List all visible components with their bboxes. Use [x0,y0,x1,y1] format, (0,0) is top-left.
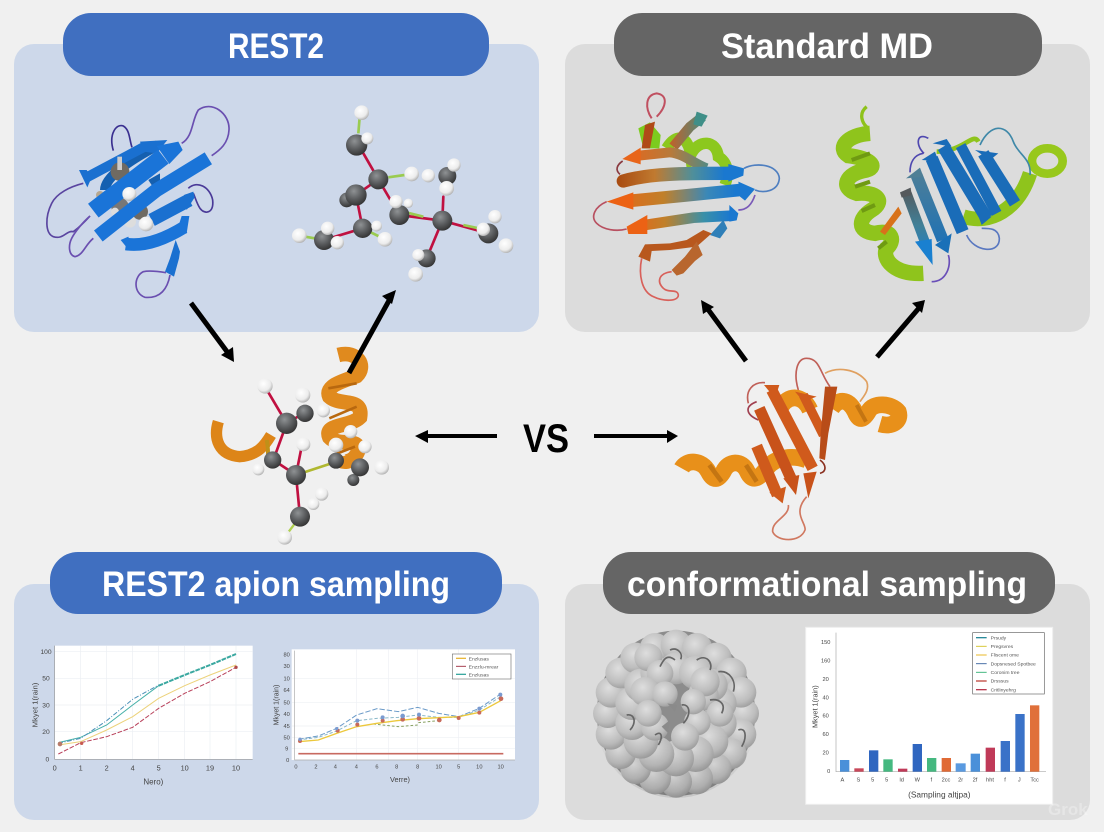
x axis tick labels: 0 [294,765,298,771]
x axis tick labels: 2r [958,777,963,783]
arrow: center to molecule [349,290,396,373]
legend: Dopsnesed Spotbee [991,661,1036,667]
x axis tick labels: 4 [131,764,135,773]
orange-blue beta-sheet protein [594,93,779,300]
bars [840,705,1039,772]
x axis tick labels: 2 [105,764,109,773]
x axis tick labels: 5 [157,764,161,773]
bar chart panel [806,627,1053,804]
x axis tick labels [840,777,1039,783]
x axis tick labels [294,765,504,771]
y axis tick labels [821,640,830,775]
legend: Enzzlu-mrear [469,664,499,670]
baseline series [298,751,503,756]
arrow: blue protein to center [191,303,234,362]
heading: REST2 apion sampling [50,552,502,614]
x axis tick labels: 10 [476,765,482,771]
axis titles: Nero) [143,778,164,787]
y axis tick labels: 60 [823,714,829,720]
green-blue protein [843,107,1063,282]
x axis tick labels [53,764,240,773]
arrow: VS right [594,430,678,443]
legend: Fliscent ome [991,653,1019,659]
x axis tick labels: 4 [334,765,337,771]
heading: conformational sampling [603,552,1055,614]
axis titles: Verre) [390,775,410,784]
axis title x: (Sampling altjpa) [908,789,971,799]
heading: conformational sampling: conformational sampling [627,565,1027,604]
blue beta-sheet protein [47,107,229,297]
y axis tick labels: 50 [42,676,50,683]
axis titles: Mkyet 1(rain) [273,685,280,725]
heading: REST2: REST2 [228,27,324,66]
watermark: Grok [1048,800,1088,819]
axis titles [30,682,164,787]
orange helix with molecule, center left [217,354,389,545]
x axis tick labels: 10 [232,764,240,773]
legend: Coronim tree [991,670,1020,676]
x axis tick labels: A [840,777,844,783]
legend: Pregsvres [991,644,1014,650]
x axis tick labels: 5 [457,765,460,771]
x axis tick labels: 5 [885,777,888,783]
panel: REST2 [14,44,539,332]
y axis tick labels: 64 [284,688,290,694]
axis title y: Mkyet 1(rain) [810,685,819,728]
y axis tick labels: 20 [42,729,50,736]
sphere crevices [627,649,745,747]
data markers [298,693,503,743]
legend: Enzlusas [469,656,489,662]
legend: Critlinyehrg [991,687,1016,693]
legend [452,654,511,679]
y axis tick labels: 160 [821,659,830,665]
x axis tick labels: 2cc [942,777,951,783]
x axis tick labels: Tcc [1030,777,1039,783]
x axis tick labels: 19 [206,764,214,773]
y axis tick labels: 20 [823,677,829,683]
y axis tick labels: 150 [821,640,830,646]
y axis tick labels: 9 [285,747,288,753]
y axis tick labels: 0 [286,758,289,764]
x axis tick labels: 2 [314,765,318,771]
line chart: left [30,646,253,787]
x axis tick labels: S [856,777,860,783]
x axis tick labels: W [915,777,921,783]
line chart: right [273,649,515,784]
y axis tick labels: 50 [284,735,290,741]
arrow: center to green-blue protein [877,300,925,357]
x axis tick labels: 6 [375,765,379,771]
heading: REST2 apion sampling: REST2 apion sampling [102,565,450,604]
y axis tick labels [40,649,52,764]
y axis tick labels: 40 [284,712,290,718]
y axis tick labels: 10 [284,676,290,682]
y axis tick labels: 100 [40,649,52,656]
y axis tick labels: 40 [823,695,829,701]
chart lines [58,654,236,754]
orange protein, center right [682,358,899,540]
axis titles [273,685,410,784]
ball-and-stick molecule, REST2 panel [292,105,513,282]
y axis tick labels: 20 [823,750,829,756]
sphere: grey clustered conformations [593,629,759,798]
x axis tick labels: 0 [53,764,57,773]
arrow: VS left [415,430,497,443]
panel: REST2 apion sampling [14,584,539,820]
x axis tick labels: 8 [395,765,398,771]
y axis tick labels: 30 [42,702,50,709]
x axis tick labels: 10 [436,765,442,771]
x axis tick labels: 4 [355,765,358,771]
x axis tick labels: 5 [871,777,874,783]
panel: Standard MD [565,44,1090,332]
legend: Prsudy [991,635,1007,641]
legend [973,633,1044,694]
y axis tick labels: 80 [284,652,290,658]
heading: Standard MD [614,13,1042,76]
x axis tick labels: 10 [498,765,504,771]
x axis tick labels: 2f [973,777,978,783]
legend: Enzlusas [469,672,489,678]
legend: Drsssus [991,679,1009,685]
x axis tick labels: ld [899,777,904,783]
x axis tick labels: 10 [181,764,189,773]
x axis tick labels: J [1018,777,1021,783]
x axis tick labels: 8 [416,765,419,771]
y axis tick labels: 30 [284,664,290,670]
VS label: VS [523,417,569,461]
y axis tick labels: 45 [284,724,290,730]
y axis tick labels [284,652,290,764]
x axis tick labels: hht [986,777,994,783]
arrow: center to orange-blue protein [701,300,746,361]
heading: REST2 [63,13,489,76]
y axis tick labels: 0 [827,769,830,775]
panel: conformational sampling [565,584,1090,820]
heading: Standard MD: Standard MD [721,27,933,66]
y axis tick labels: 0 [45,757,49,764]
y axis tick labels: 50 [284,700,290,706]
y axis tick labels: 60 [823,732,829,738]
x axis tick labels: f [931,777,933,783]
axis titles: Mkyet 1(rain) [30,682,39,727]
chart lines [298,694,501,742]
x axis tick labels: f [1004,777,1006,783]
x axis tick labels: 1 [79,764,83,773]
